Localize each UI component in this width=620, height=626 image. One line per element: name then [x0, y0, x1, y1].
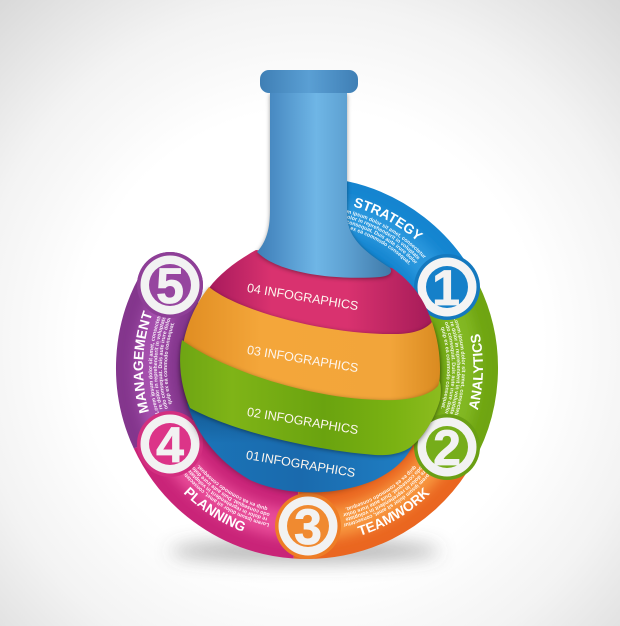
band 03 (orange): [183, 287, 440, 415]
band 03 (orange): 03 INFOGRAPHICS: [246, 343, 359, 375]
segment: teamwork (orange): [296, 454, 439, 525]
label: analytics: re dolor in reprehenderit in voluptate: [450, 322, 461, 414]
band 02 (green): 02 INFOGRAPHICS: [246, 405, 359, 437]
segment: analytics (green): [439, 299, 464, 454]
label: analytics: [440, 319, 483, 416]
flask neck: [257, 70, 391, 278]
band 04 (pink): [209, 250, 432, 350]
badge 1: 1: [432, 260, 460, 316]
label: teamwork: odo consequat. Duis aute irure dolor: [343, 466, 422, 516]
badge 1: [414, 254, 480, 320]
badge 3: 3: [294, 499, 322, 555]
flask bands: [180, 250, 441, 492]
label: teamwork: TEAMWORK: [357, 487, 430, 535]
band 02 (green): [180, 340, 441, 455]
label: analytics: quip ex ea commodo consequat.: [440, 327, 451, 408]
flask body shadow: [180, 250, 440, 494]
label: teamwork: Lorem ipsum dolor sit amet, consectetur: [344, 474, 429, 527]
label: management: [133, 310, 174, 414]
badge 2: 2: [433, 420, 461, 476]
label: teamwork: quip ex ea commodo consequat.: [345, 466, 416, 511]
badge 5: 5: [156, 258, 184, 314]
label: strategy: Lorem ipsum dolor sit amet, consectetur: [347, 210, 426, 258]
badge 5: [137, 252, 203, 318]
label: planning: Lorem ipsum dolor sit amet, consectetur: [184, 472, 269, 528]
label: management: re dolor in reprehenderit in voluptate: [153, 317, 166, 410]
segment: planning (pink): [165, 434, 296, 525]
label: management: Lorem ipsum dolor sit amet, consectetur: [148, 316, 161, 414]
label: planning: odo consequat. Duis aute irure dolor: [192, 467, 270, 516]
label: analytics: Lorem ipsum dolor sit amet, consectetur: [454, 319, 466, 416]
badge 2: [414, 414, 480, 480]
label: management: odo consequat. Duis aute irure dolor: [158, 318, 171, 409]
flask lip: [260, 70, 358, 93]
ring: five coloured segments: [137, 214, 464, 525]
badge 4: [137, 411, 203, 477]
ring labels: [133, 198, 483, 535]
label: teamwork: re dolor in reprehenderit in voluptate: [346, 470, 426, 521]
badge 4: 4: [156, 417, 184, 473]
band 04 (pink): 04 INFOGRAPHICS: [246, 281, 359, 313]
band 01 (blue): [187, 403, 414, 492]
ground shadow: [170, 539, 440, 563]
label: planning: quip ex ea commodo consequat.: [198, 464, 268, 510]
label: analytics: odo consequat. Duis aute irure dolor: [444, 322, 456, 414]
number badges: [137, 252, 480, 559]
label: management: quip ex ea commodo consequat.: [164, 322, 174, 404]
label: planning: re dolor in reprehenderit in voluptate: [188, 470, 268, 520]
label: management: MANAGEMENT: [133, 310, 152, 414]
segment: management (purple): [137, 252, 203, 434]
band 01 (blue): 01 INFOGRAPHICS: [245, 448, 356, 480]
label: strategy: re dolor in reprehenderit in voluptate: [347, 214, 420, 260]
label: strategy: odo consequat. Duis aute irure dolor: [348, 220, 418, 264]
badge 3: [275, 493, 341, 559]
segment: strategy (blue): [340, 214, 448, 299]
label: strategy: STRATEGY: [354, 198, 424, 240]
label: analytics: ANALYTICS: [469, 334, 483, 410]
label: strategy: quip ex ea commodo consequat.: [348, 226, 410, 265]
label: planning: PLANNING: [184, 486, 245, 531]
